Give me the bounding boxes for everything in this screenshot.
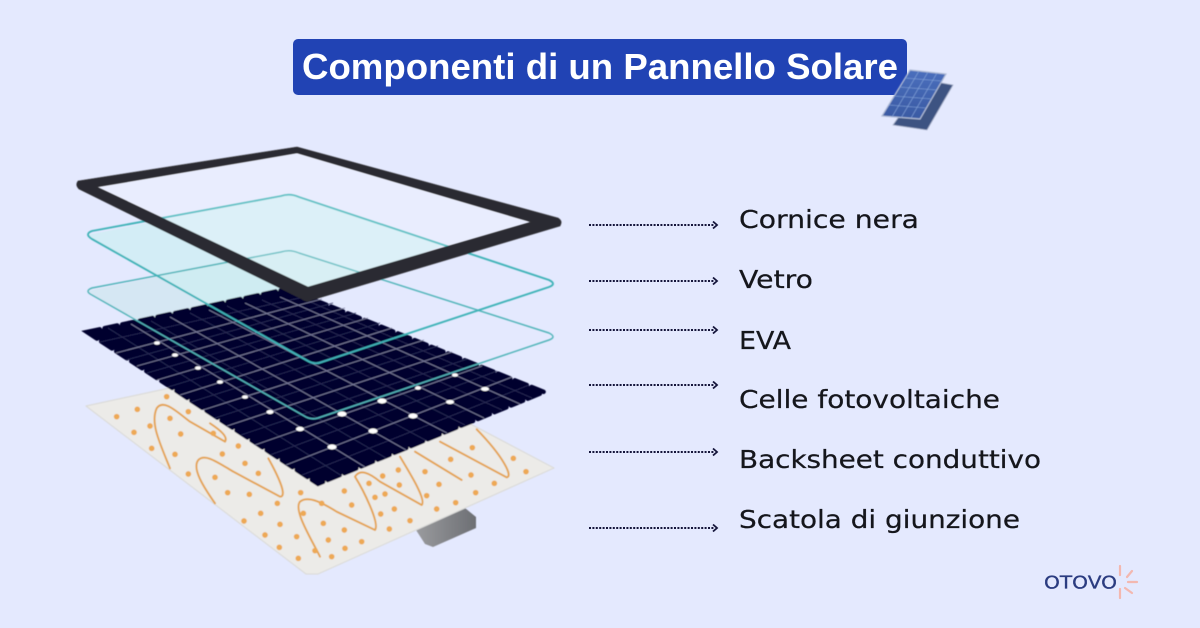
title — [293, 39, 907, 95]
title: Componenti di un Pannello Solare — [302, 46, 898, 87]
arrow: Scatola di giunzione — [589, 524, 717, 532]
conductive dots — [114, 394, 529, 561]
cell main grid — [116, 297, 520, 467]
layer: glass outline — [88, 195, 553, 363]
conductive wave lines — [155, 405, 509, 557]
label: Celle fotovoltaiche: Celle fotovoltaiche — [739, 385, 1000, 414]
logo: Otovo: OTOVO — [1044, 572, 1117, 594]
arrow: Celle fotovoltaiche — [589, 382, 717, 388]
label: Backsheet conduttivo: Backsheet conduttivo — [739, 445, 1041, 474]
labels and arrows — [589, 205, 1041, 534]
label: Scatola di giunzione: Scatola di giunzione — [739, 505, 1020, 534]
logo: Otovo — [1044, 566, 1137, 598]
label: EVA: EVA — [739, 326, 791, 355]
layer: junction box — [416, 508, 476, 547]
arrow: EVA — [589, 326, 717, 334]
layer: photovoltaic cells — [87, 289, 544, 484]
label: Vetro: Vetro — [739, 265, 813, 294]
cell minor grid — [100, 294, 532, 476]
layer: conductive backsheet — [86, 350, 554, 574]
cell junction highlights — [154, 341, 489, 450]
glass and EVA fills — [87, 194, 445, 345]
label: Cornice nera: Cornice nera — [739, 205, 919, 234]
icon: solar panels — [882, 70, 953, 130]
arrow: Vetro — [589, 278, 717, 284]
layer: EVA outline — [88, 251, 553, 419]
arrow: Backsheet conduttivo — [589, 448, 717, 456]
arrow: Cornice nera — [589, 222, 717, 228]
exploded solar panel diagram — [77, 147, 561, 574]
layer: black frame — [77, 147, 561, 301]
